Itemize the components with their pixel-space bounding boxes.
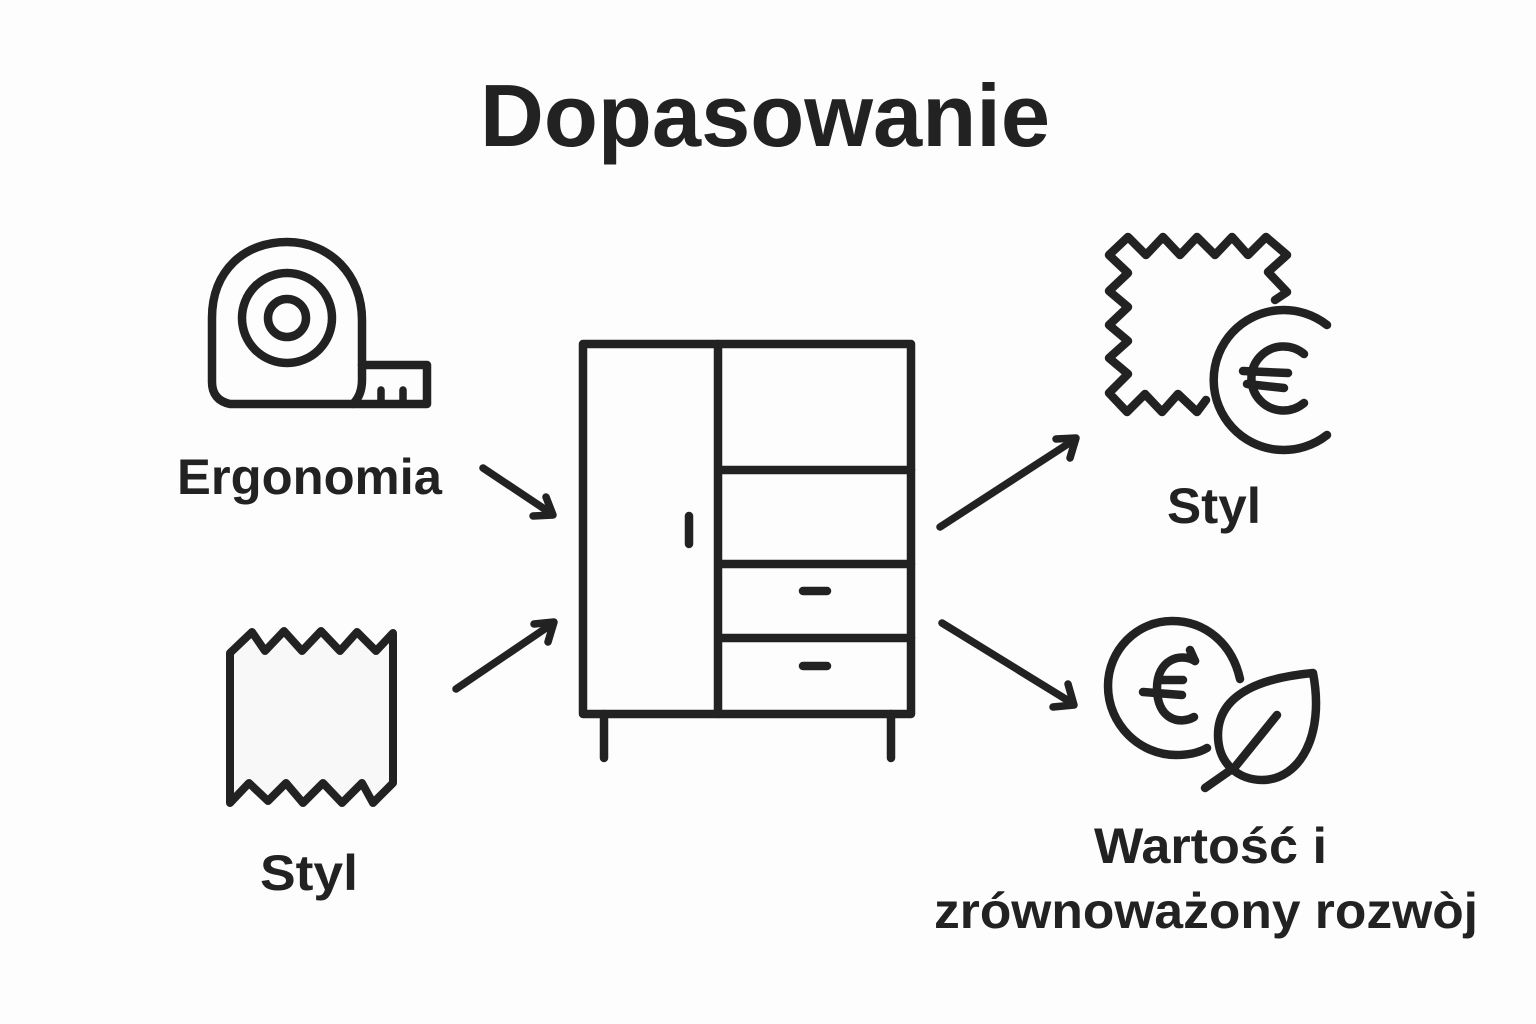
label: Styl (left): Styl	[260, 845, 358, 901]
label: Styl (right): Styl	[1167, 478, 1261, 534]
wardrobe divider and shelves	[718, 344, 911, 714]
arrow: wardrobe to Styl	[940, 438, 1076, 527]
wardrobe drawer handles	[803, 591, 827, 666]
wardrobe door handle	[685, 516, 693, 544]
icon: fabric with euro	[1109, 237, 1327, 450]
arrow: Ergonomia to wardrobe	[483, 468, 553, 516]
label: Wartość i zrównoważony rozwòj: zrównoważony rozwòj	[934, 883, 1478, 939]
wardrobe	[583, 344, 911, 758]
label: Ergonomia: Ergonomia	[177, 449, 443, 505]
wardrobe legs	[604, 714, 891, 758]
arrow: Styl to wardrobe	[456, 622, 554, 689]
arrow: wardrobe to value and sustainability	[942, 623, 1074, 707]
icon: euro coin with leaf	[1108, 621, 1316, 788]
wardrobe body	[583, 344, 911, 714]
label: Wartość i zrównoważony rozwòj: Wartość i	[1094, 818, 1327, 874]
icon: fabric swatch	[230, 631, 393, 803]
label: Wartość i zrównoważony rozwòj	[934, 818, 1478, 939]
icon: tape measure	[212, 242, 427, 404]
title: Dopasowanie	[480, 66, 1050, 165]
